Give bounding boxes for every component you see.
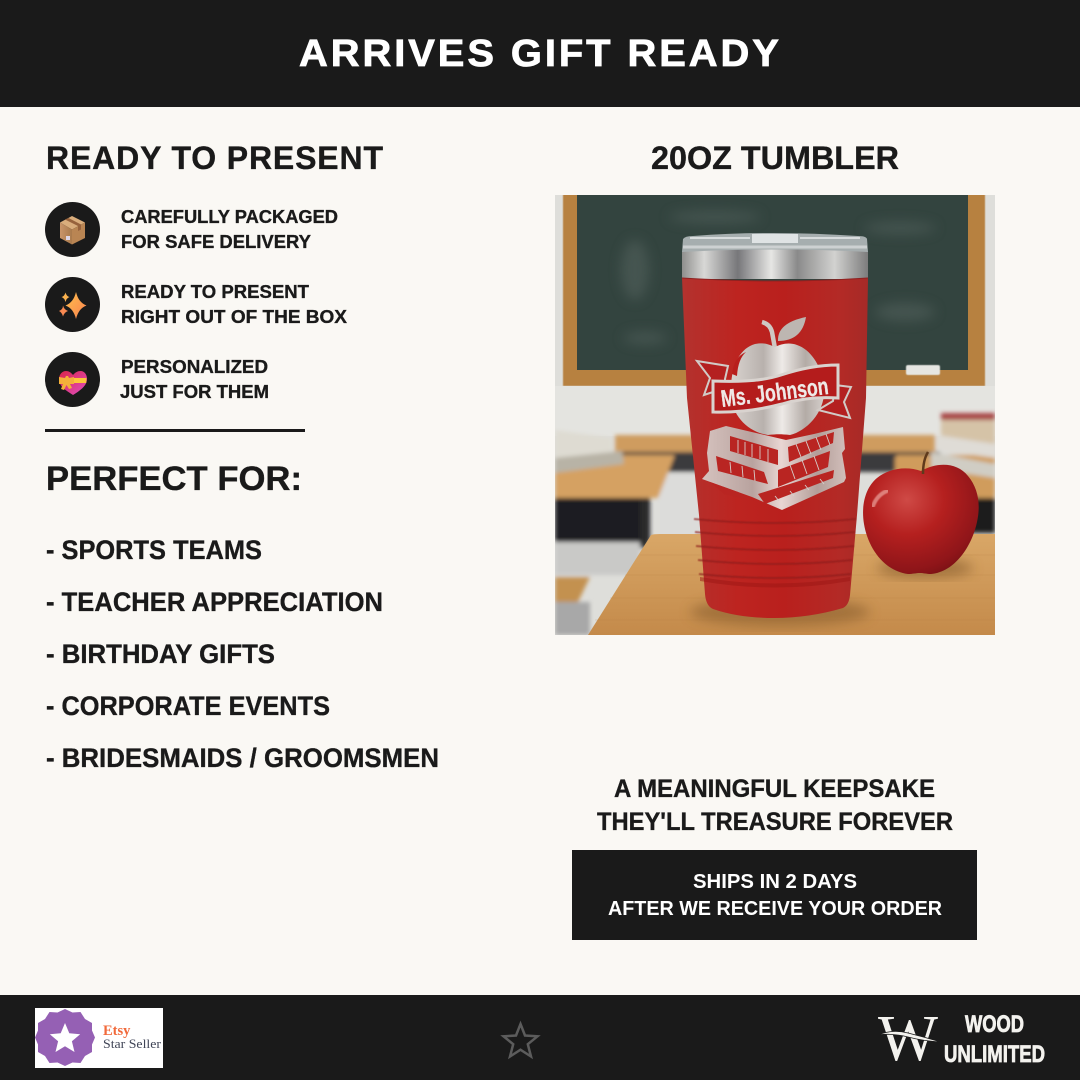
engraved banner xyxy=(713,365,838,412)
text: personalized: PERSONALIZED xyxy=(121,356,268,377)
wood unlimited logo xyxy=(878,1002,1045,1075)
engraved name: Ms. Johnson xyxy=(719,373,830,413)
apple xyxy=(863,452,979,578)
badge label: Star Seller xyxy=(103,1036,162,1051)
text: personalized xyxy=(120,356,269,402)
list: perfect for xyxy=(46,535,439,773)
list: perfect for: - SPORTS TEAMS xyxy=(46,535,262,565)
text: ready to present xyxy=(121,281,348,327)
shipping callout xyxy=(572,850,977,940)
engraved banner tails xyxy=(697,361,728,395)
badge star xyxy=(50,1023,80,1052)
tumbler lid xyxy=(682,233,868,252)
logo wordmark: WOOD xyxy=(965,1011,1024,1038)
text: carefully packaged xyxy=(121,206,338,252)
text: ready to present: RIGHT OUT OF THE BOX xyxy=(121,306,348,327)
tumbler shadow xyxy=(690,598,870,626)
classroom background xyxy=(555,190,995,635)
engraved apple xyxy=(731,343,824,435)
engraved books xyxy=(702,426,846,510)
heading: perfect for: PERFECT FOR: xyxy=(46,460,302,498)
list: perfect for: - BRIDESMAIDS / GROOMSMEN xyxy=(46,743,439,773)
text: personalized: JUST FOR THEM xyxy=(120,381,269,402)
footer bar xyxy=(0,995,1080,1080)
desk xyxy=(588,534,995,635)
red body xyxy=(682,278,868,618)
header bar xyxy=(0,0,1080,107)
engraving: apple books banner xyxy=(697,317,851,510)
text: carefully packaged: CAREFULLY PACKAGED xyxy=(121,206,338,227)
right books xyxy=(941,417,995,445)
keepsake tagline: THEY'LL TREASURE FOREVER xyxy=(597,808,953,836)
keepsake tagline: A MEANINGFUL KEEPSAKE xyxy=(614,775,935,803)
keepsake tagline xyxy=(597,775,953,836)
badge label: Etsy xyxy=(103,1023,131,1039)
engraved stem and leaf xyxy=(762,322,776,354)
product photo xyxy=(555,190,995,635)
list: perfect for: - TEACHER APPRECIATION xyxy=(46,587,383,617)
list: perfect for: - BIRTHDAY GIFTS xyxy=(46,639,275,669)
list: perfect for: - CORPORATE EVENTS xyxy=(46,691,330,721)
steel band xyxy=(682,250,868,279)
icon: star outline xyxy=(504,1024,538,1057)
tumbler xyxy=(682,233,868,618)
feature list: ready to present xyxy=(45,202,348,407)
icon: gift heart xyxy=(45,352,100,407)
logo monogram: W xyxy=(878,1002,939,1075)
left books xyxy=(555,430,612,460)
shipping callout: AFTER WE RECEIVE YOUR ORDER xyxy=(608,898,943,920)
icon: sparkles xyxy=(45,277,100,332)
icon: package xyxy=(45,202,100,257)
title: ARRIVES GIFT READY xyxy=(299,33,779,75)
shipping callout: SHIPS IN 2 DAYS xyxy=(693,871,857,893)
text: ready to present: READY TO PRESENT xyxy=(121,281,310,302)
wood unlimited logo: UNLIMITED xyxy=(944,1041,1045,1068)
heading: 20oz tumbler: 20OZ TUMBLER xyxy=(651,140,899,176)
badge label xyxy=(103,1023,162,1051)
badge seal xyxy=(35,1009,95,1066)
etsy star seller badge xyxy=(35,1008,163,1068)
heading: ready to present: READY TO PRESENT xyxy=(46,140,383,176)
text: carefully packaged: FOR SAFE DELIVERY xyxy=(121,231,312,252)
ribs xyxy=(694,519,856,578)
